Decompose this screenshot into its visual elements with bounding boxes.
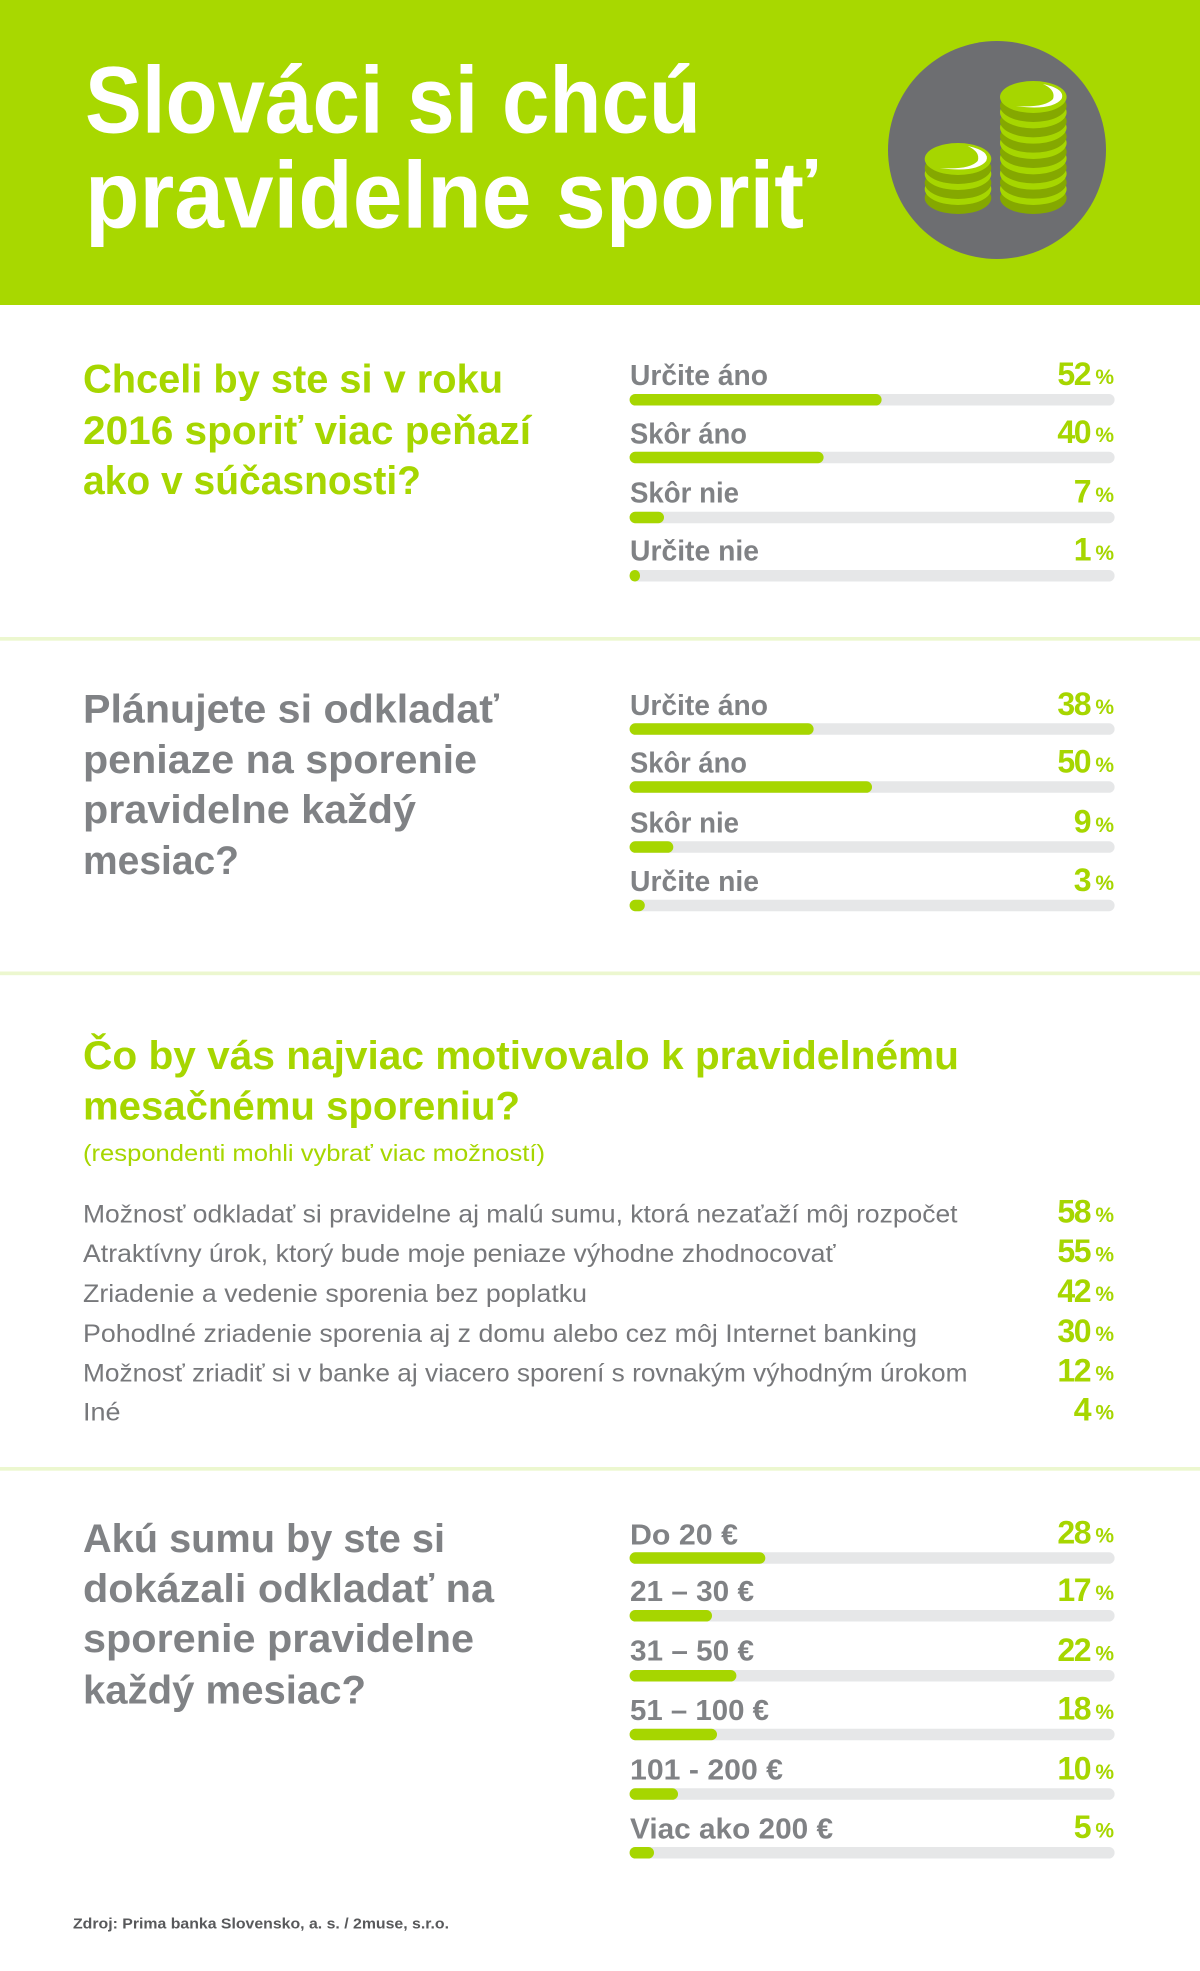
bar row: Určite nie 1 % <box>630 532 1115 582</box>
bar row: Skôr nie 7 %: 7 <box>1074 474 1091 510</box>
list row: 4 % <box>83 1392 1114 1428</box>
heading: question 4: sporenie pravidelne <box>83 1617 474 1661</box>
bar row: 101 - 200 € 10 %: % <box>1095 1761 1114 1784</box>
heading: question 4: dokázali odkladať na <box>83 1567 495 1611</box>
bar row: Určite nie 3 %: 3 <box>1074 862 1091 898</box>
bar row: Skôr áno 50 %: 50 <box>1057 744 1091 780</box>
note: multiple answers: (respondenti mohli vybrať viac možností) <box>83 1140 545 1166</box>
bar row: Určite áno 52 %: % <box>1095 366 1114 389</box>
list row: 58 % <box>83 1194 1114 1230</box>
bar row: 101 - 200 € 10 % <box>630 1751 1115 1800</box>
bar row: Skôr nie 9 % <box>630 804 1115 853</box>
bar row: Do 20 € 28 %: % <box>1095 1524 1114 1548</box>
list row: 4 %: Iné <box>83 1398 120 1426</box>
bar row: Skôr nie 7 %: % <box>1095 484 1114 507</box>
list row: 30 %: Pohodlné zriadenie sporenia aj z domu alebo cez môj Internet banking <box>83 1320 917 1348</box>
bar row: Skôr áno 40 %: 40 <box>1057 414 1091 450</box>
bar row: Určite nie 3 %: Určite nie <box>630 866 759 898</box>
bar chart: question 2 <box>630 686 1115 911</box>
heading: question 1 <box>83 358 533 503</box>
bar row: Určite nie 1 %: 1 <box>1074 532 1091 568</box>
bar row: 101 - 200 € 10 %: 10 <box>1057 1751 1091 1787</box>
bar row: 51 – 100 € 18 %: % <box>1095 1701 1114 1724</box>
list row: 42 %: % <box>1095 1283 1114 1306</box>
heading: question 2: peniaze na sporenie <box>83 738 477 782</box>
list row: 58 %: Možnosť odkladať si pravidelne aj malú sumu, ktorá nezaťaží môj rozpočet <box>83 1201 958 1229</box>
bar row: Určite nie 1 %: Určite nie <box>630 536 759 568</box>
bar row: Určite áno 52 % <box>630 356 1115 406</box>
bar row: 31 – 50 € 22 %: 22 <box>1057 1632 1091 1668</box>
bar row: 51 – 100 € 18 %: 18 <box>1057 1690 1091 1726</box>
title: Slováci si chcú <box>85 48 701 154</box>
heading: question 2: mesiac? <box>83 839 239 883</box>
source footnote: Zdroj: Prima banka Slovensko, a. s. / 2muse, s.r.o. <box>73 1916 449 1932</box>
title <box>85 48 817 248</box>
bar row: 51 – 100 € 18 %: 51 – 100 € <box>630 1695 769 1727</box>
bar row: Skôr áno 40 % <box>630 414 1115 463</box>
title: pravidelne sporiť <box>85 142 817 248</box>
list row: 12 %: Možnosť zriadiť si v banke aj viacero sporení s rovnakým výhodným úrokom <box>83 1360 968 1388</box>
list: motivation answers <box>83 1194 1114 1428</box>
bar row: 21 – 30 € 17 % <box>630 1572 1115 1622</box>
list row: 42 %: 42 <box>1057 1273 1091 1309</box>
bar row: Skôr áno 50 %: Skôr áno <box>630 748 747 780</box>
bar row: Určite áno 52 %: Určite áno <box>630 360 768 392</box>
bar row: Skôr nie 9 %: % <box>1095 814 1114 837</box>
list row: 55 %: Atraktívny úrok, ktorý bude moje peniaze výhodne zhodnocovať <box>83 1240 836 1268</box>
list row: 42 % <box>83 1273 1114 1309</box>
list row: 30 %: 30 <box>1057 1313 1091 1349</box>
list row: 12 % <box>83 1352 1114 1388</box>
bar row: 21 – 30 € 17 %: 17 <box>1057 1572 1091 1608</box>
heading: question 3: mesačnému sporeniu? <box>83 1084 520 1128</box>
bar row: 51 – 100 € 18 % <box>630 1690 1115 1740</box>
bar row: Skôr áno 40 %: % <box>1095 424 1114 447</box>
list row: 55 % <box>83 1233 1114 1269</box>
heading: question 4: Akú sumu by ste si <box>83 1517 445 1561</box>
bar row: 31 – 50 € 22 %: 31 – 50 € <box>630 1636 754 1668</box>
list row: 4 %: % <box>1095 1402 1114 1424</box>
bar row: Skôr nie 7 %: Skôr nie <box>630 478 739 510</box>
bar row: Určite áno 38 %: % <box>1095 696 1114 719</box>
header banner <box>0 0 1200 305</box>
heading: question 4 <box>83 1517 495 1712</box>
list row: 58 %: % <box>1095 1204 1114 1227</box>
bar row: Viac ako 200 € 5 %: Viac ako 200 € <box>630 1814 833 1846</box>
bar row: Určite nie 1 %: % <box>1095 542 1114 565</box>
bar row: Viac ako 200 € 5 % <box>630 1809 1115 1858</box>
bar row: Určite nie 3 %: % <box>1095 872 1114 895</box>
heading: question 4: každý mesiac? <box>83 1668 366 1712</box>
list row: 4 %: 4 <box>1074 1392 1092 1428</box>
icon: left coin stack <box>925 143 991 214</box>
bar row: Určite áno 38 % <box>630 686 1115 735</box>
list row: 55 %: 55 <box>1057 1233 1091 1269</box>
icon: right coin stack <box>1000 81 1067 214</box>
bar row: Do 20 € 28 % <box>630 1514 1115 1564</box>
heading: question 3: Čo by vás najviac motivovalo k pravidelnému <box>83 1032 959 1078</box>
heading: question 2 <box>83 688 500 883</box>
heading: question 2: Plánujete si odkladať <box>83 688 500 732</box>
heading: question 1: ako v súčasnosti? <box>83 459 421 503</box>
bar row: 31 – 50 € 22 %: % <box>1095 1643 1114 1666</box>
bar row: 101 - 200 € 10 %: 101 - 200 € <box>630 1755 783 1787</box>
bar row: 21 – 30 € 17 %: % <box>1095 1582 1114 1605</box>
icon: coin stacks in circle <box>888 41 1106 259</box>
bar chart: question 1 <box>630 356 1115 582</box>
list row: 42 %: Zriadenie a vedenie sporenia bez poplatku <box>83 1280 587 1308</box>
heading: question 3 <box>83 1032 959 1128</box>
bar row: Viac ako 200 € 5 %: 5 <box>1074 1809 1091 1845</box>
bar row: Skôr áno 50 %: % <box>1095 754 1114 777</box>
bar row: Skôr nie 9 %: 9 <box>1074 804 1091 840</box>
bar row: Určite áno 38 %: Určite áno <box>630 690 768 722</box>
bar row: Viac ako 200 € 5 %: % <box>1095 1820 1114 1843</box>
list row: 12 %: 12 <box>1057 1352 1091 1388</box>
list row: 58 %: 58 <box>1057 1194 1091 1230</box>
bar row: Určite áno 38 %: 38 <box>1057 686 1091 722</box>
bar row: Určite nie 3 % <box>630 862 1115 911</box>
heading: question 1: 2016 sporiť viac peňazí <box>83 409 533 453</box>
bar row: 21 – 30 € 17 %: 21 – 30 € <box>630 1576 754 1608</box>
bar row: Do 20 € 28 %: 28 <box>1057 1514 1091 1550</box>
bar chart: question 4 <box>630 1514 1115 1858</box>
heading: question 1: Chceli by ste si v roku <box>83 358 503 402</box>
bar row: Do 20 € 28 %: Do 20 € <box>630 1519 738 1551</box>
bar row: Skôr nie 7 % <box>630 474 1115 523</box>
bar row: 31 – 50 € 22 % <box>630 1632 1115 1682</box>
bar row: Určite áno 52 %: 52 <box>1057 356 1091 392</box>
bar row: Skôr nie 9 %: Skôr nie <box>630 808 739 840</box>
bar row: Skôr áno 40 %: Skôr áno <box>630 418 747 450</box>
bar row: Skôr áno 50 % <box>630 744 1115 793</box>
list row: 30 % <box>83 1313 1114 1349</box>
heading: question 2: pravidelne každý <box>83 788 417 832</box>
list row: 55 %: % <box>1095 1244 1114 1266</box>
list row: 30 %: % <box>1095 1323 1114 1346</box>
list row: 12 %: % <box>1095 1362 1114 1386</box>
